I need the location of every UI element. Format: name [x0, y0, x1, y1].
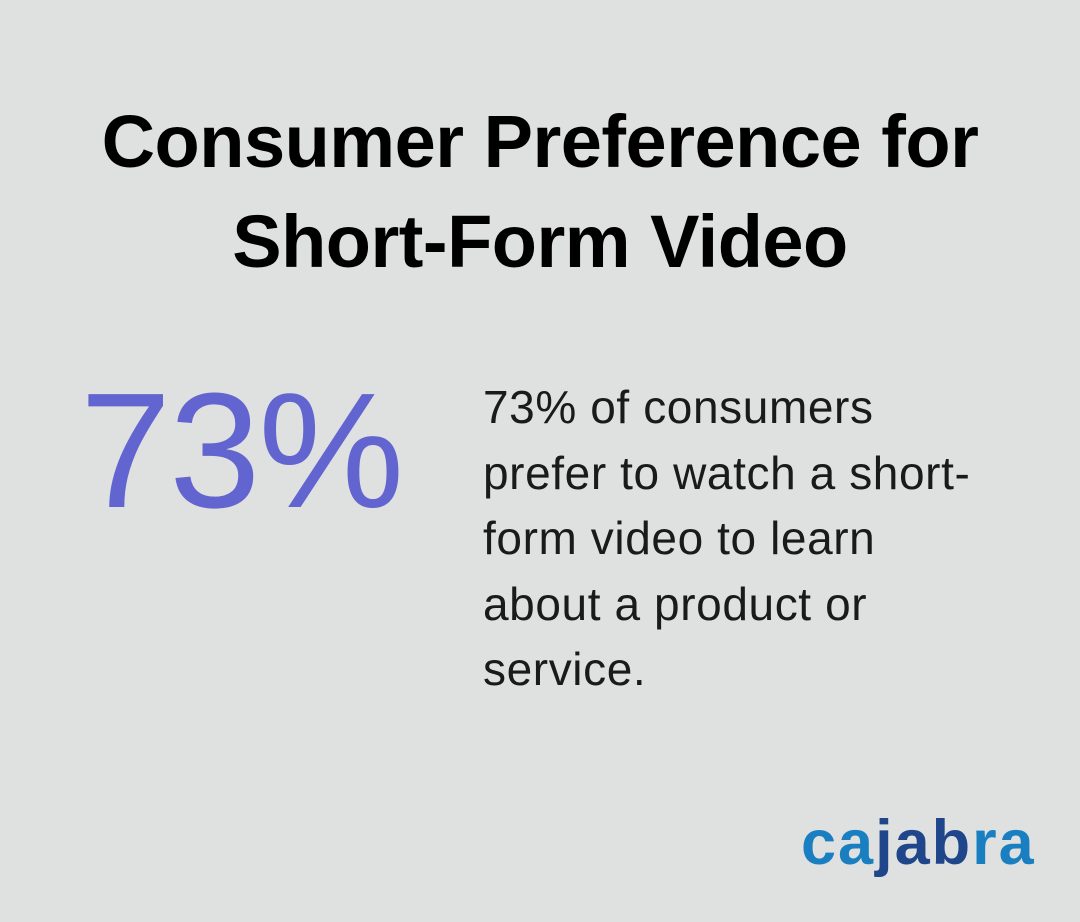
title: Consumer Preference for [102, 100, 978, 183]
logo: cajabra: cajabra [801, 808, 1036, 878]
title: Short-Form Video [232, 200, 848, 283]
description text: 73% of consumers [483, 381, 874, 433]
description text: form video to learn [483, 512, 875, 564]
description text: prefer to watch a short- [483, 446, 970, 498]
description text: service. [483, 643, 646, 695]
description text [483, 381, 970, 695]
title [102, 100, 978, 283]
description text: about a product or [483, 578, 867, 630]
big stat: 73%: 73% [80, 359, 402, 542]
